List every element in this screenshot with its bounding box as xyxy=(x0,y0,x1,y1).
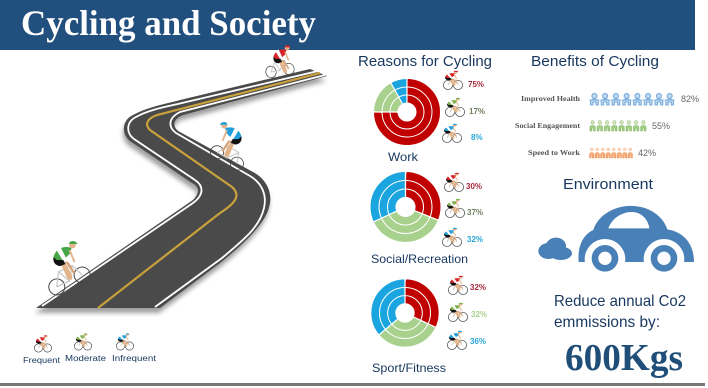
sport: value 32% green: 32% xyxy=(471,310,487,319)
legend label: moderate: Moderate xyxy=(65,354,107,363)
sport: value 32%: 32% xyxy=(470,283,486,292)
title: Cycling and Society xyxy=(21,3,316,43)
winding road illustration xyxy=(35,69,327,313)
benefit row: speed to work: Speed to Work xyxy=(528,148,581,157)
sport: value 36%: 36% xyxy=(470,337,486,346)
benefit row: improved health xyxy=(521,93,699,106)
donut: social/recreation xyxy=(372,170,440,238)
bottom rule xyxy=(0,383,705,386)
work: cyclist blue xyxy=(442,124,462,143)
social: cyclist green xyxy=(445,199,465,218)
social: value 30%: 30% xyxy=(466,182,482,191)
text: reduce annual co2: Reduce annual Co2 xyxy=(554,293,686,310)
benefit row: social engagement xyxy=(515,120,670,132)
heading: environment: Environment xyxy=(563,176,654,193)
social: cyclist red xyxy=(444,173,464,192)
benefit row: improved health: Improved Health xyxy=(521,94,581,103)
legend icon: infrequent xyxy=(116,333,134,350)
social: cyclist blue xyxy=(442,228,462,247)
benefit row: improved health: 82% xyxy=(681,94,699,104)
legend label: frequent: Frequent xyxy=(23,356,61,365)
label: sport/fitness: Sport/Fitness xyxy=(372,361,446,375)
benefit row: social engagement: 55% xyxy=(652,121,670,131)
social: value 37%: 37% xyxy=(467,208,483,217)
label: work: Work xyxy=(388,150,419,164)
benefit row: social engagement: Social Engagement xyxy=(515,121,581,130)
legend label: infrequent: Infrequent xyxy=(112,354,157,363)
work: value 8%: 8% xyxy=(471,133,483,142)
benefit row: speed to work xyxy=(528,147,656,159)
sport: cyclist green xyxy=(448,303,468,322)
legend icon: frequent xyxy=(34,335,52,352)
heading: reasons for cycling: Reasons for Cycling xyxy=(358,53,492,70)
sport: cyclist red xyxy=(448,276,468,295)
donut: sport/fitness xyxy=(375,277,437,343)
donut: work xyxy=(372,77,436,141)
work: value 17%: 17% xyxy=(469,107,485,116)
sport: cyclist blue xyxy=(447,331,467,350)
social: value 32%: 32% xyxy=(467,235,483,244)
text: emmissions by: emmissions by: xyxy=(554,314,660,331)
work: value 75%: 75% xyxy=(468,80,484,89)
icon: car with exhaust cloud xyxy=(538,206,697,286)
legend xyxy=(23,333,157,365)
heading: benefits of cycling: Benefits of Cycling xyxy=(531,53,659,70)
label: social/recreation: Social/Recreation xyxy=(371,252,468,266)
cyclist: red on road top xyxy=(264,45,295,78)
work: cyclist green xyxy=(445,98,465,117)
benefit row: speed to work: 42% xyxy=(638,148,656,158)
legend icon: moderate xyxy=(74,333,92,350)
cyclist: green on road bottom xyxy=(44,241,93,298)
title banner xyxy=(0,0,695,50)
work: cyclist red xyxy=(443,71,463,90)
big number: 600Kgs: 600Kgs xyxy=(565,337,683,379)
cyclist: blue on road curve xyxy=(208,122,248,173)
